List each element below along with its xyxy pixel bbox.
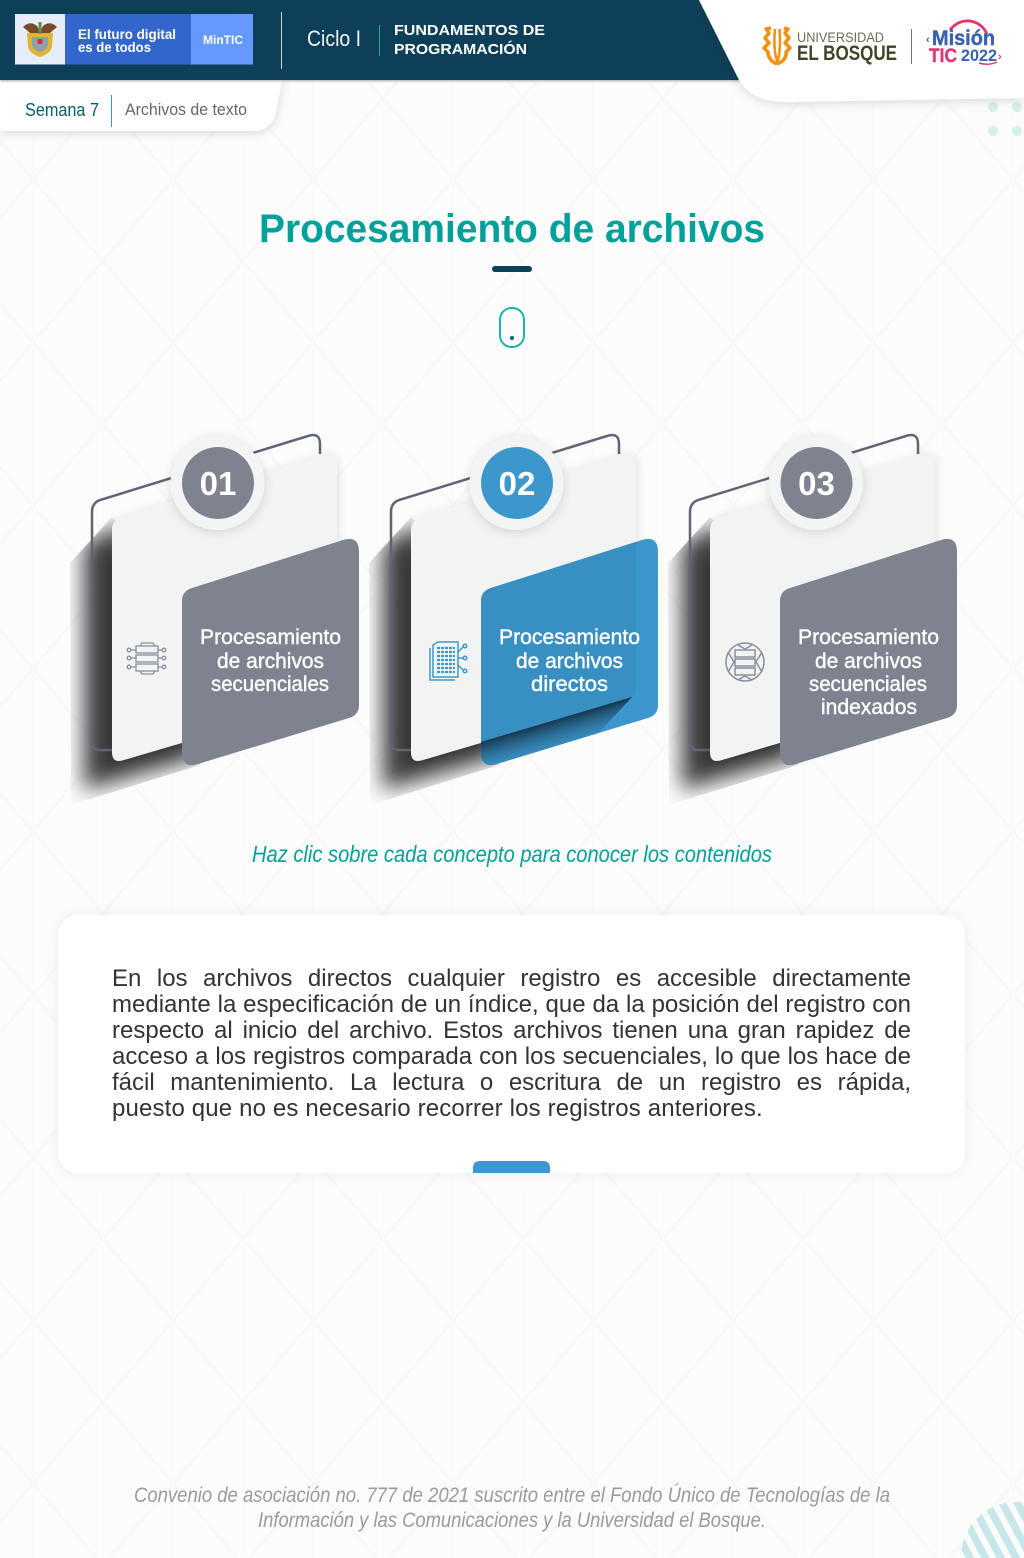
card panel <box>182 539 359 765</box>
footer note: Convenio de asociación no. 777 de 2021 suscrito entre el Fondo Único de Tecnologías de la <box>134 1484 890 1507</box>
semana label: Semana 7 <box>25 100 99 120</box>
icon: globe server <box>726 643 764 681</box>
card 02 <box>383 435 658 790</box>
title underline <box>492 266 532 272</box>
icon: mouse scroll <box>500 308 524 347</box>
logo block: El futuro digital: El futuro digital <box>78 26 176 42</box>
decorative striped corner <box>962 1502 1024 1558</box>
decorative dots <box>988 102 1022 136</box>
logo: Universidad El Bosque <box>764 28 912 65</box>
ciclo label: Ciclo I <box>307 26 361 51</box>
icon: server nodes <box>127 643 166 674</box>
card panel: de archivos <box>815 650 922 673</box>
card panel active: Procesamiento <box>499 626 640 649</box>
course name <box>394 22 545 58</box>
logo: Mision TIC 2022 <box>926 21 1002 67</box>
course name: PROGRAMACIÓN <box>394 40 527 58</box>
card panel: secuenciales <box>809 673 927 696</box>
icon: orange emblem <box>764 28 790 64</box>
panel blue tab <box>473 1161 550 1173</box>
instruction text: Haz clic sobre cada concepto para conocer los contenidos <box>252 841 772 867</box>
number badge 02 <box>470 436 564 530</box>
card panel: de archivos <box>217 650 324 673</box>
card panel active <box>481 530 658 770</box>
number badge 01: 01 <box>200 465 236 502</box>
content panel text: mediante la especificación de un índice, que da la posición del registro con <box>112 991 911 1018</box>
course name: FUNDAMENTOS DE <box>394 22 545 39</box>
number badge 02: 02 <box>499 465 535 502</box>
content panel text: fácil mantenimiento. La lectura o escritura de un registro es rápida, <box>112 1069 911 1096</box>
content panel text: puesto que no es necesario recorrer los registros anteriores. <box>112 1095 763 1122</box>
number badge 03: 03 <box>798 465 835 502</box>
header bar <box>0 0 740 80</box>
card panel: indexados <box>821 696 917 719</box>
right white header shape <box>699 0 1024 102</box>
card 03 <box>682 435 957 790</box>
logo: Mision TIC 2022: › <box>998 51 1002 63</box>
logo block: El futuro digital: es de todos <box>78 39 151 55</box>
card panel: Procesamiento <box>200 626 341 649</box>
semana tab <box>0 80 282 131</box>
content panel text: respecto al inicio del archivo. Estos archivos tienen una gran rapidez de <box>112 1017 911 1044</box>
logo: Mision TIC 2022: Misión <box>932 27 995 50</box>
content panel text <box>112 965 911 1122</box>
content panel text: acceso a los registros comparada con los secuenciales, lo que los hace de <box>112 1043 911 1070</box>
topic label: Archivos de texto <box>125 101 247 119</box>
card panel active: de archivos <box>516 650 623 673</box>
logo: Universidad El Bosque: EL BOSQUE <box>797 42 897 65</box>
logo: Mision TIC 2022: 2022 <box>961 47 997 65</box>
logo: Mision TIC 2022: TIC <box>929 45 957 67</box>
card panel: Procesamiento <box>798 626 939 649</box>
footer note: Información y las Comunicaciones y la Universidad el Bosque. <box>258 1509 766 1532</box>
content panel text: En los archivos directos cualquier registro es accesible directamente <box>112 965 911 992</box>
icon: indexed document <box>430 642 467 680</box>
number badge 03 <box>769 436 863 530</box>
card panel active: directos <box>531 673 608 696</box>
logo: Universidad El Bosque: UNIVERSIDAD <box>797 30 884 45</box>
title: Procesamiento de archivos <box>259 207 765 251</box>
logo block: El futuro digital <box>15 14 253 64</box>
content panel background <box>58 915 965 1173</box>
number badge 01 <box>170 436 264 530</box>
logo: Mision TIC 2022: ‹ <box>926 34 930 46</box>
card panel: secuenciales <box>211 673 329 696</box>
footer note <box>134 1484 890 1532</box>
icon: coat of arms <box>23 22 57 57</box>
card panel <box>780 539 957 765</box>
card 01 <box>84 435 359 790</box>
logo block: El futuro digital: MinTIC <box>203 33 243 47</box>
